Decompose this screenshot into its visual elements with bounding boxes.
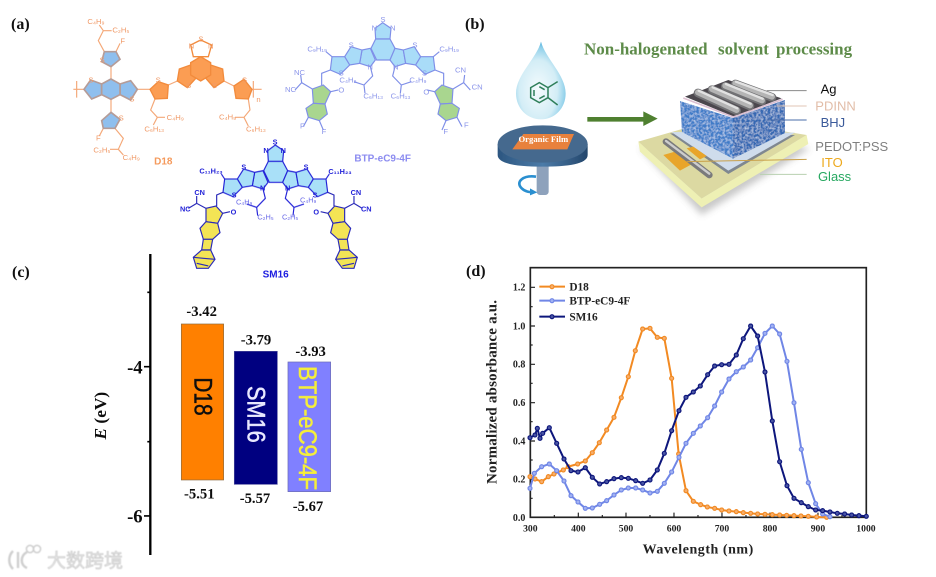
- molecule: SM16: O: [313, 208, 319, 217]
- y axis tick labels: 0.0: [513, 513, 525, 524]
- layer labels: Glass: [818, 169, 852, 184]
- layer labels: PDINN: [815, 99, 856, 114]
- y axis tick labels: 0.8: [513, 360, 525, 371]
- molecule: BTP-eC9-4F: N: [390, 24, 396, 33]
- molecule: BTP-eC9-4F: O: [338, 86, 344, 95]
- layer labels: Ag: [821, 81, 837, 96]
- molecule: BTP-eC9-4F: C₆H₁₃: [391, 91, 411, 100]
- molecule: BTP-eC9-4F: C₄H₉: [339, 76, 357, 85]
- panel label (b): (b): [465, 16, 485, 33]
- molecule: D18: F: [120, 36, 125, 45]
- heading: non-halogenated solvent processing: processing: [776, 39, 853, 58]
- molecule: SM16: S: [304, 163, 309, 172]
- molecule: BTP-eC9-4F: N: [393, 62, 399, 71]
- molecule: SM16: N: [281, 146, 286, 155]
- x axis tick labels: 400: [571, 524, 586, 535]
- molecule: BTP-eC9-4F: F: [322, 127, 327, 136]
- molecule: D18: S: [129, 94, 134, 103]
- bar: BTP-eC9-4F: [288, 344, 331, 515]
- bar: D18: -5.51: [184, 486, 215, 502]
- x axis tick labels: 600: [667, 524, 681, 535]
- watermark: [9, 545, 123, 572]
- molecule: D18: S: [156, 76, 161, 85]
- molecule: SM16: CN: [351, 188, 361, 197]
- icon: spin coater with organic film: Organic Film: [518, 134, 569, 144]
- molecule: SM16: C₁₁H₂₃: [199, 166, 223, 175]
- molecule: D18: S: [186, 81, 191, 90]
- bar: BTP-eC9-4F: -5.67: [293, 499, 323, 515]
- bar: SM16: -5.57: [240, 491, 270, 507]
- y axis tick labels: 0.4: [513, 436, 525, 447]
- energy axis: -4: [127, 357, 143, 378]
- bar: SM16: SM16: [242, 386, 269, 443]
- molecule: BTP-eC9-4F: O: [423, 88, 429, 97]
- molecule: D18: S: [242, 76, 247, 85]
- device stack: [638, 80, 810, 215]
- molecule: BTP-eC9-4F: S: [380, 15, 385, 24]
- energy axis: E (eV): [91, 392, 110, 440]
- panel: absorbance chart: [485, 268, 876, 557]
- molecule: D18: S: [212, 81, 217, 90]
- layer labels: BHJ: [821, 115, 845, 130]
- icon: spin coater with organic film: [498, 125, 588, 195]
- molecule: SM16: C₂H₅: [257, 212, 274, 221]
- molecule: SM16: CN: [361, 204, 372, 213]
- molecule: D18: C₄H₉: [219, 112, 236, 121]
- bar: BTP-eC9-4F: -3.93: [295, 344, 326, 360]
- legend: D18: [569, 282, 589, 294]
- molecule: BTP-eC9-4F: CN: [472, 82, 483, 91]
- molecule: SM16: N: [263, 146, 269, 155]
- layer labels: [815, 81, 889, 184]
- molecule: SM16: S: [273, 138, 278, 147]
- x axis tick labels: 700: [715, 524, 729, 535]
- curve: SM16: [530, 326, 866, 516]
- molecule: BTP-eC9-4F: C₆H₁₃: [363, 91, 383, 100]
- molecule: D18: N: [189, 41, 194, 50]
- molecule: D18: C₆H₁₃: [144, 125, 164, 134]
- molecule: D18: C₄H₉: [87, 17, 105, 26]
- compound name D18: D18: [154, 157, 173, 168]
- panel label (c): (c): [12, 264, 30, 281]
- bar: BTP-eC9-4F: BTP-eC9-4F: [293, 366, 320, 490]
- molecule: D18: [73, 17, 266, 168]
- molecule: D18: S: [100, 56, 105, 65]
- curve: D18: [530, 328, 827, 517]
- molecule: BTP-eC9-4F: N: [372, 24, 377, 33]
- molecule: BTP-eC9-4F: [285, 15, 483, 165]
- x axis tick labels: 1000: [856, 524, 876, 535]
- bar: SM16: -3.79: [241, 333, 271, 349]
- molecule: BTP-eC9-4F: NC: [285, 85, 297, 94]
- molecule: SM16: S: [232, 190, 237, 199]
- molecule: BTP-eC9-4F: CN: [455, 66, 466, 75]
- molecule: D18: S: [119, 114, 124, 123]
- energy axis: [91, 254, 150, 555]
- molecule: BTP-eC9-4F: S: [422, 68, 427, 77]
- y axis tick labels: [513, 282, 525, 524]
- x axis tick labels: 900: [811, 524, 825, 535]
- molecule: BTP-eC9-4F: NC: [294, 68, 306, 77]
- molecule: D18: F: [96, 134, 101, 143]
- y axis tick labels: 1.2: [513, 282, 525, 293]
- molecule: SM16: C₄H₉: [300, 196, 317, 205]
- bar: D18: -3.42: [186, 304, 217, 320]
- energy axis: -6: [127, 507, 143, 528]
- icon: solvent drop with xylene: [516, 42, 566, 119]
- panel label (d): (d): [466, 263, 486, 280]
- molecule: BTP-eC9-4F: S: [349, 40, 354, 49]
- molecule: BTP-eC9-4F: F: [464, 120, 469, 129]
- heading: non-halogenated solvent processing: Non-halogenated: [584, 39, 708, 58]
- molecule: BTP-eC9-4F: C₉H₁₉: [307, 45, 327, 54]
- molecule: D18: C₆H₁₃: [246, 125, 266, 134]
- legend: SM16: [569, 312, 598, 324]
- molecule: SM16: C₁₁H₂₃: [328, 167, 352, 176]
- y axis tick labels: 0.2: [513, 475, 525, 486]
- molecule: SM16: NC: [180, 204, 191, 213]
- layer labels: ITO: [821, 155, 843, 170]
- arrow: process direction: [587, 111, 658, 126]
- compound name SM16: SM16: [263, 269, 289, 280]
- heading: non-halogenated solvent processing: solvent: [718, 39, 769, 58]
- x axis tick labels: 800: [763, 524, 777, 535]
- molecule: SM16: N: [260, 183, 265, 192]
- legend: [539, 282, 630, 324]
- x axis title: Wavelength (nm): [643, 542, 754, 557]
- molecule: BTP-eC9-4F: F: [443, 127, 448, 136]
- molecule: D18: C₂H₅: [112, 26, 129, 35]
- molecule: D18: S: [88, 75, 93, 84]
- molecule: SM16: C₄H₉: [236, 197, 253, 206]
- molecule: BTP-eC9-4F: C₄H₉: [409, 76, 427, 85]
- panel label (a): (a): [11, 16, 30, 33]
- molecule: D18: n: [256, 95, 261, 104]
- layer labels: PEDOT:PSS: [815, 139, 889, 154]
- molecule: SM16: N: [285, 183, 290, 192]
- watermark: 大数跨境: [47, 550, 123, 572]
- compound name BTP-eC9-4F: BTP-eC9-4F: [354, 154, 411, 165]
- molecule: SM16: [180, 138, 372, 280]
- legend: BTP-eC9-4F: [569, 296, 630, 308]
- molecule: D18: C₄H₉: [167, 113, 184, 122]
- molecule: D18: C₄H₉: [123, 153, 140, 162]
- x axis tick labels: 500: [619, 524, 633, 535]
- molecule: BTP-eC9-4F: S: [339, 68, 344, 77]
- molecule: SM16: S: [313, 190, 318, 199]
- x axis tick labels: [523, 524, 876, 535]
- molecule: BTP-eC9-4F: C₉H₁₉: [439, 45, 459, 54]
- molecule: SM16: S: [241, 163, 246, 172]
- panel: energy levels: [91, 254, 331, 555]
- x axis tick labels: 300: [523, 524, 538, 535]
- molecule: D18: N: [208, 41, 214, 50]
- molecule: D18: S: [198, 34, 203, 43]
- bar: D18: D18: [188, 377, 215, 416]
- y axis tick labels: 0.6: [513, 398, 525, 409]
- molecule: D18: C₂H₅: [93, 146, 110, 155]
- panel: device processing: [498, 39, 889, 215]
- molecule: SM16: CN: [194, 188, 205, 197]
- bar: D18: [181, 304, 224, 502]
- molecule: BTP-eC9-4F: N: [367, 62, 373, 71]
- plot frame and ticks: [530, 268, 866, 517]
- bar: SM16: [234, 333, 277, 507]
- molecule: SM16: C₂H₅: [282, 212, 298, 221]
- y axis title: Normalized absorbance a.u.: [485, 300, 501, 484]
- molecule: BTP-eC9-4F: S: [412, 40, 417, 49]
- y axis tick labels: 1.0: [513, 321, 525, 332]
- molecule: SM16: O: [231, 208, 237, 217]
- molecule: BTP-eC9-4F: F: [300, 122, 305, 131]
- curve: BTP-eC9-4F: [530, 326, 830, 517]
